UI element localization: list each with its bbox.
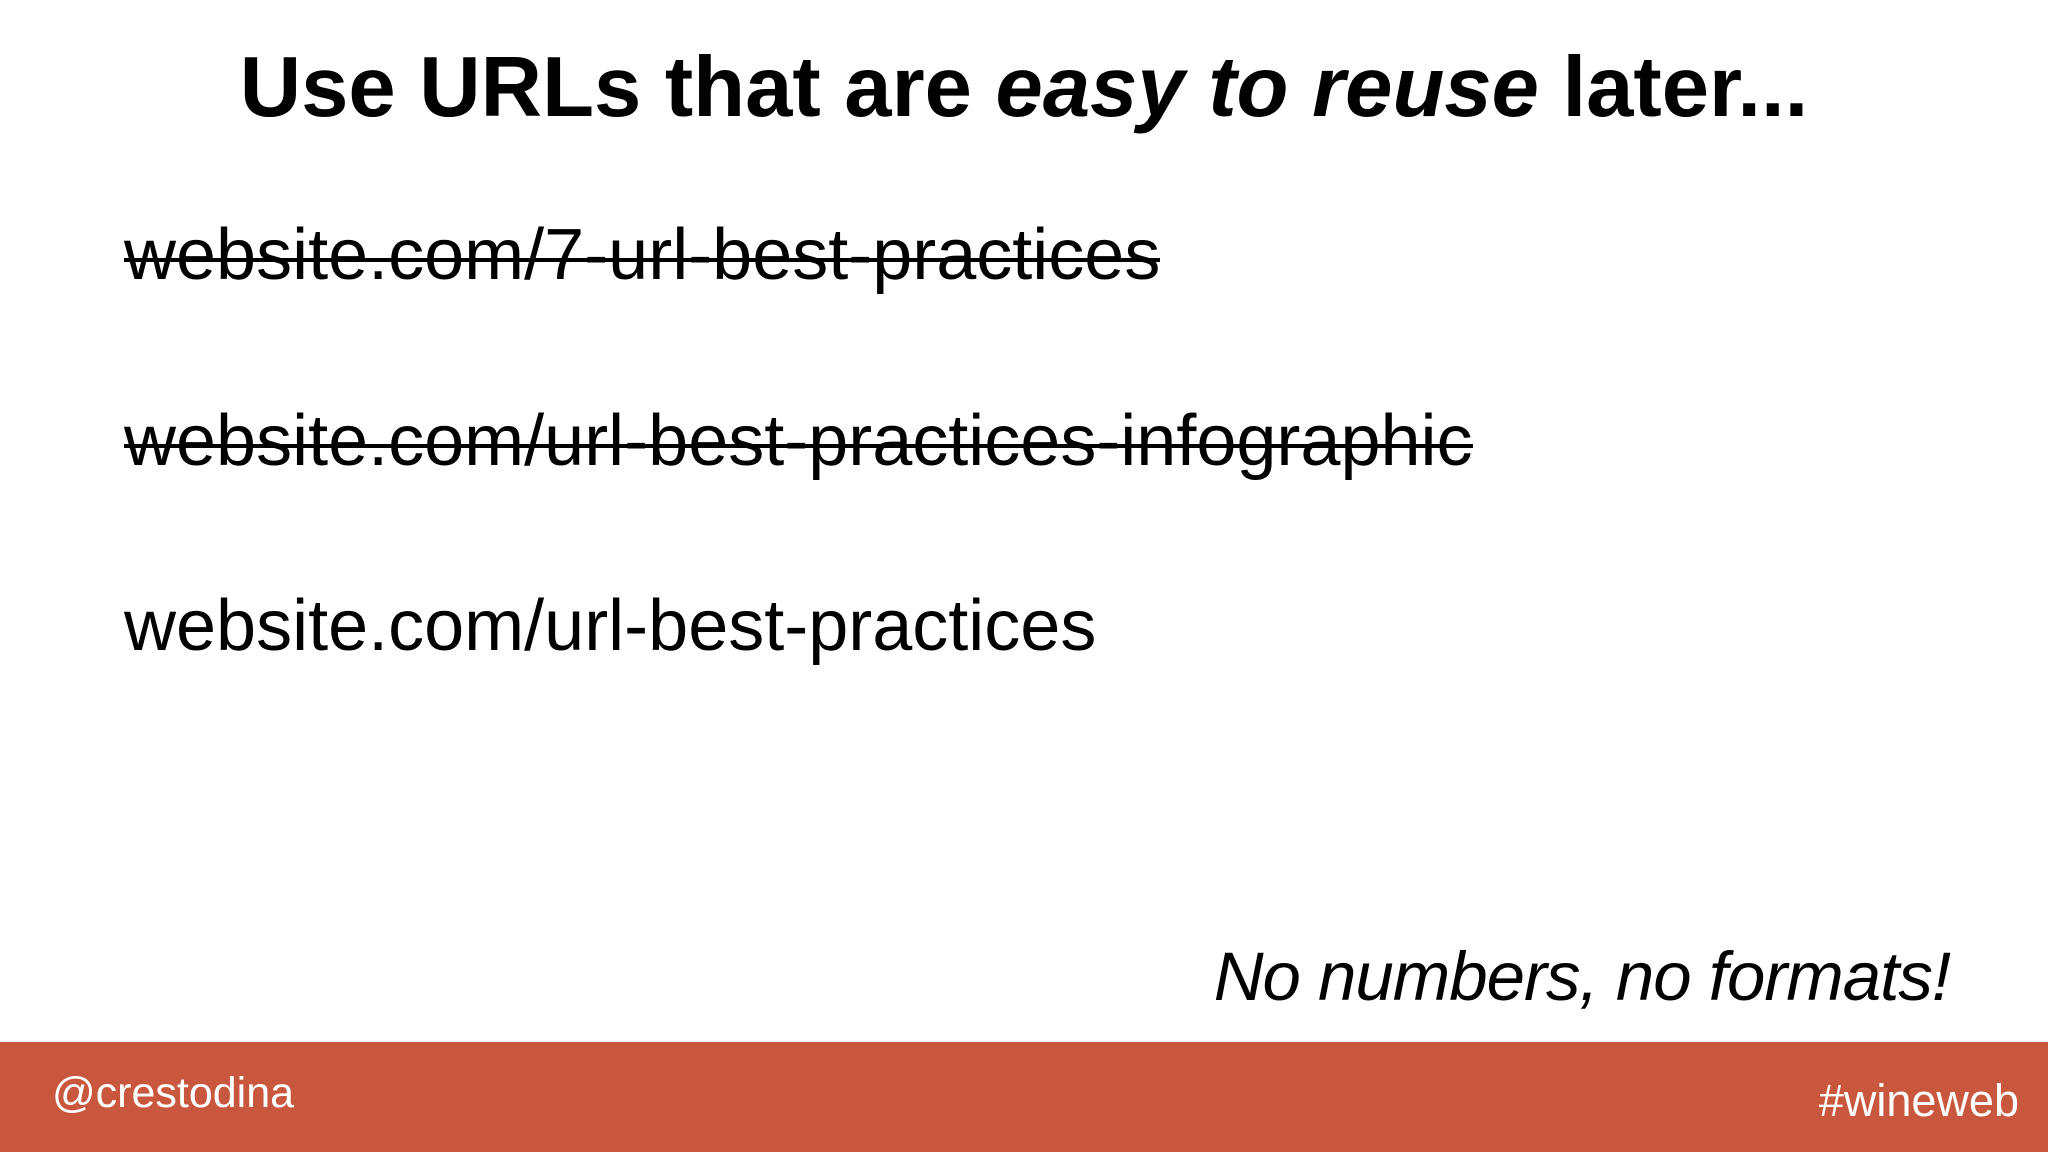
handle: @crestodina <box>52 1069 294 1117</box>
note: No numbers, no formats! <box>1214 938 1950 1015</box>
title: Use URLs that are easy to reuse later... <box>240 40 1808 135</box>
url 2 struck: website.com/url-best-practices-infographic <box>124 401 1473 481</box>
url 1 struck: website.com/7-url-best-practices <box>124 215 1160 295</box>
hashtag: #wineweb <box>1819 1075 2019 1126</box>
footer bar <box>0 1042 2048 1152</box>
url 3 good: website.com/url-best-practices <box>124 586 1096 666</box>
